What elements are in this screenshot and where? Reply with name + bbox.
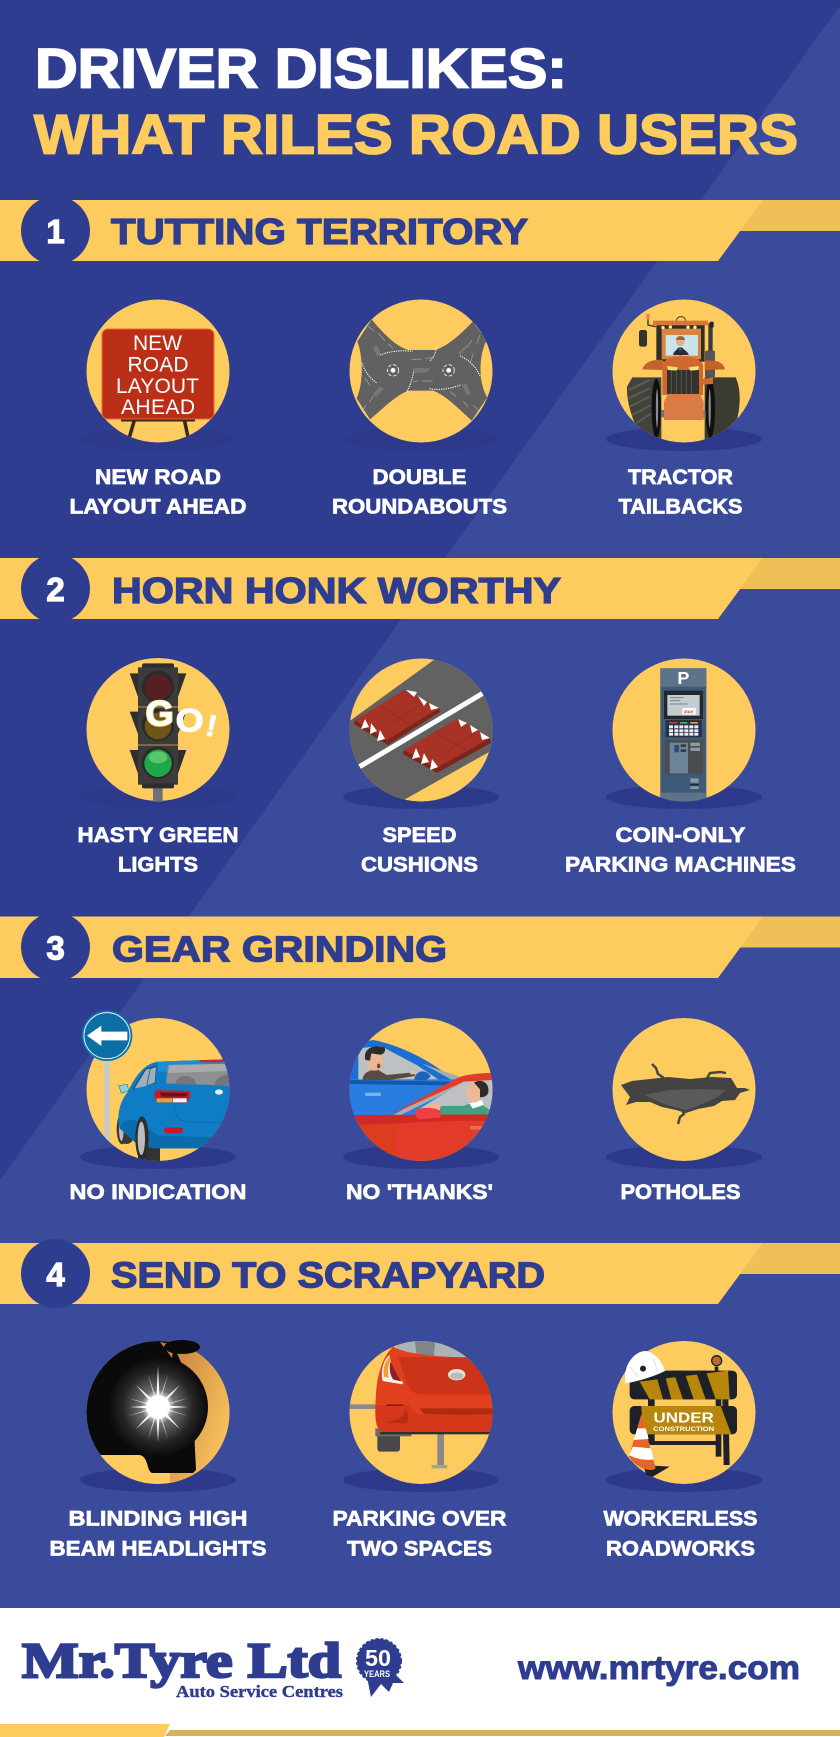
icon: two drivers in cars [343, 1018, 499, 1169]
title [34, 36, 798, 166]
website url: www.mrtyre.com [517, 1649, 800, 1686]
banner 1 [0, 196, 840, 265]
label: coin-only parking machines: PARKING MACHINES [565, 854, 796, 876]
footer stripe [0, 1724, 840, 1737]
icon: parking machine [606, 658, 762, 809]
label: new road layout ahead [70, 466, 246, 518]
icon: traffic light: G [146, 694, 174, 733]
label: no indication: NO INDICATION [70, 1181, 246, 1204]
panel: section 3 gear grinding [0, 912, 840, 1204]
label: workerless roadworks: WORKERLESS [604, 1508, 758, 1530]
icon: new road layout ahead sign [86, 300, 230, 442]
icon: roadworks barrier: UNDER [653, 1409, 714, 1426]
label: workerless roadworks: ROADWORKS [606, 1538, 755, 1560]
label: parking over two spaces: PARKING OVER [332, 1508, 506, 1530]
panel: footer [0, 1608, 840, 1737]
icon: speed cushions [343, 658, 499, 809]
icon: roadworks barrier [606, 1341, 762, 1492]
badge: 50 years [357, 1639, 404, 1697]
title: DRIVER DISLIKES: [35, 36, 567, 100]
label: hasty green lights: HASTY GREEN [78, 824, 238, 847]
banner 2: 2 [46, 571, 65, 608]
icon: blue car with no indication [80, 1010, 236, 1169]
badge: 50 years: 50 [365, 1645, 391, 1671]
label: no thanks: NO 'THANKS' [346, 1181, 493, 1204]
icon: new road layout ahead sign: LAYOUT [116, 375, 199, 398]
label: hasty green lights [78, 824, 238, 876]
icon: new road layout ahead sign: ROAD [128, 354, 188, 376]
label: hasty green lights: LIGHTS [118, 854, 198, 876]
banner 4: 4 [46, 1256, 65, 1293]
label: blinding high beam headlights: BLINDING HIGH [68, 1508, 248, 1530]
logo: Mr.Tyre Ltd: Mr.Tyre Ltd [22, 1632, 341, 1688]
label: new road layout ahead: LAYOUT AHEAD [70, 496, 246, 518]
label: parking over two spaces: TWO SPACES [347, 1538, 492, 1560]
label: workerless roadworks [604, 1508, 758, 1560]
banner 3: 3 [46, 930, 65, 966]
label: blinding high beam headlights: BEAM HEADLIGHTS [50, 1538, 266, 1560]
banner 2 [0, 554, 840, 623]
banner 3: GEAR GRINDING [112, 928, 447, 970]
icon: traffic light [80, 658, 236, 809]
logo: Mr.Tyre Ltd [22, 1632, 343, 1701]
icon: parking machine: P [677, 668, 689, 688]
icon: new road layout ahead sign: NEW [133, 332, 182, 355]
badge: 50 years: YEARS [364, 1669, 390, 1679]
banner 4 [0, 1239, 840, 1308]
icon: red car parking over two spaces [343, 1340, 499, 1492]
label: double roundabouts: DOUBLE [372, 466, 466, 489]
label: blinding high beam headlights [50, 1508, 266, 1560]
label: speed cushions [361, 824, 478, 876]
panel: section 4 send to scrapyard [0, 1239, 840, 1560]
label: double roundabouts [332, 466, 507, 518]
banner 3 [0, 912, 840, 982]
banner 1: 1 [46, 213, 65, 250]
label: new road layout ahead: NEW ROAD [95, 466, 221, 489]
icon: blinding headlight [80, 1338, 236, 1492]
icon: roadworks barrier: CONSTRUCTION [653, 1426, 714, 1433]
label: double roundabouts: ROUNDABOUTS [332, 496, 507, 518]
icon: pothole [606, 1018, 762, 1169]
label: coin-only parking machines: COIN-ONLY [616, 824, 746, 847]
label: coin-only parking machines [565, 824, 796, 876]
icon: traffic light: O [176, 702, 204, 739]
panel: section 1 tutting territory [0, 196, 840, 518]
banner 1: TUTTING TERRITORY [111, 211, 528, 252]
title: WHAT RILES ROAD USERS [34, 102, 798, 166]
icon: traffic light: ! [203, 709, 220, 744]
icon: tractor [606, 300, 762, 451]
icon: parking machine: PAY [684, 709, 694, 715]
banner 2: HORN HONK WORTHY [112, 570, 561, 611]
label: parking over two spaces [332, 1508, 506, 1560]
label: speed cushions: SPEED [382, 824, 456, 847]
label: speed cushions: CUSHIONS [361, 854, 478, 876]
icon: new road layout ahead sign: AHEAD [121, 396, 195, 419]
label: tractor tailbacks [618, 466, 742, 518]
logo: Mr.Tyre Ltd: Auto Service Centres [176, 1682, 343, 1701]
banner 4: SEND TO SCRAPYARD [111, 1254, 545, 1296]
label: tractor tailbacks: TAILBACKS [618, 496, 742, 518]
panel: section 2 horn honk worthy [0, 554, 840, 876]
label: potholes: POTHOLES [620, 1181, 740, 1204]
label: tractor tailbacks: TRACTOR [628, 466, 733, 489]
icon: double roundabouts [350, 300, 492, 442]
